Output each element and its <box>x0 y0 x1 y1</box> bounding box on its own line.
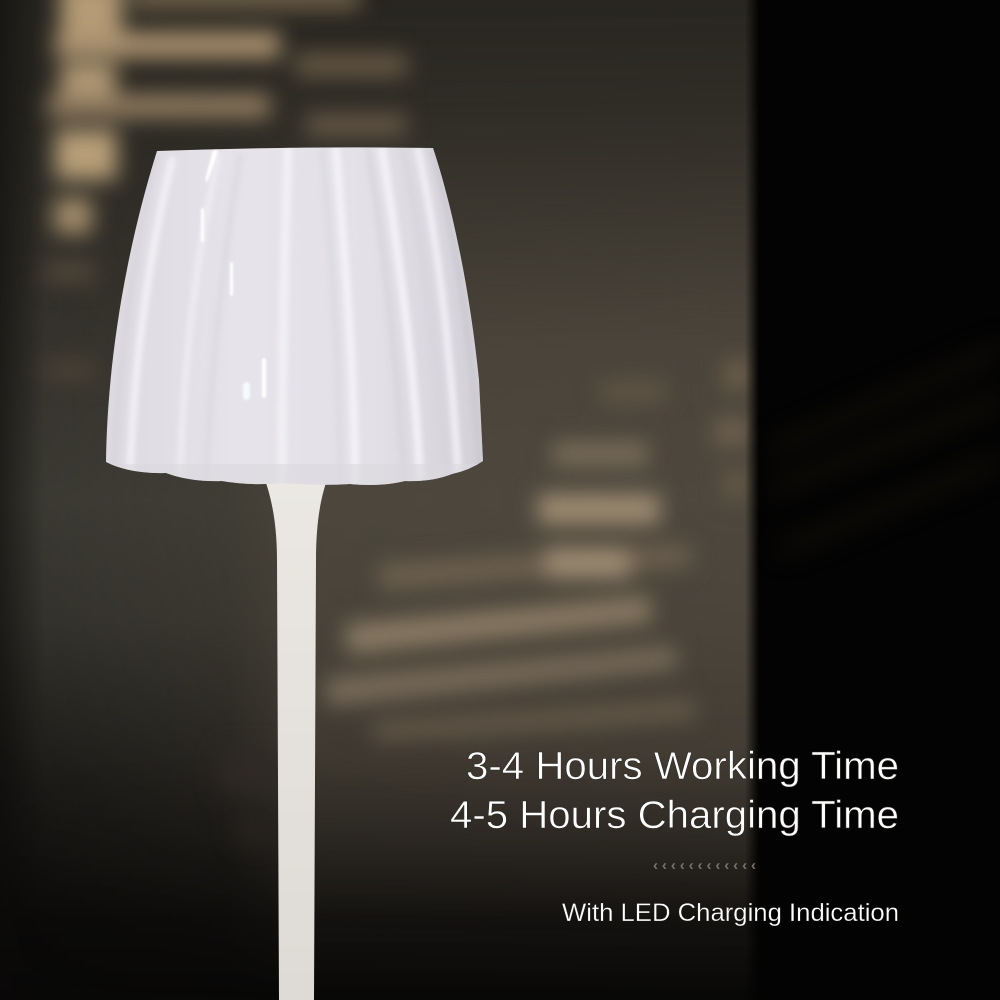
lamp stem <box>265 480 327 1000</box>
caption: working and charging time <box>450 745 899 837</box>
line: LED charging indication: With LED Charging Indication <box>562 899 899 927</box>
lamp shade <box>100 140 490 490</box>
background: faint light left of stem <box>220 750 276 842</box>
shade rim shadow <box>110 464 478 485</box>
decorative chevron row: ‹‹‹‹‹‹‹‹‹‹‹‹ <box>653 857 756 874</box>
background: blurred window light stripes lower centre <box>325 360 750 763</box>
background: dim wall <box>0 0 758 1000</box>
shade pleats <box>114 150 480 482</box>
background: black shadow on the right <box>745 0 1000 1000</box>
line: charging time: 4-5 Hours Charging Time <box>450 794 899 837</box>
background: blurred window light stripes upper left <box>44 0 407 382</box>
line: working time: 3-4 Hours Working Time <box>466 745 899 788</box>
shade highlights <box>201 150 266 400</box>
